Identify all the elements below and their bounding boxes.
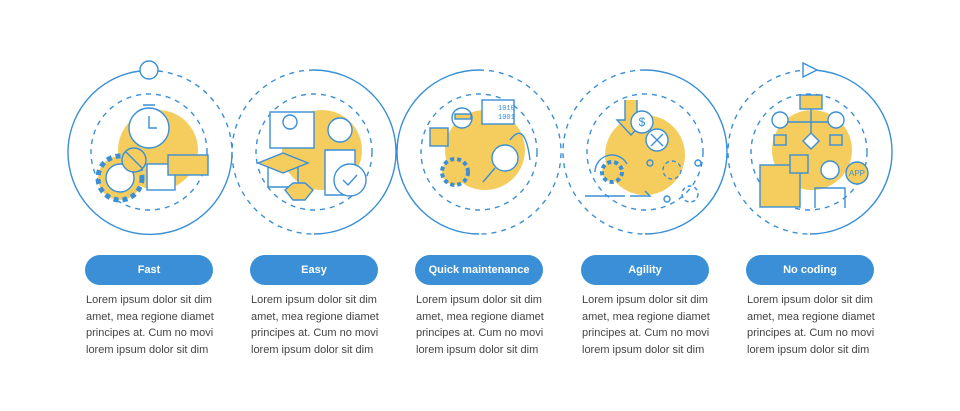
pill: Quick maintenance bbox=[415, 255, 543, 285]
panel: fast circle bbox=[68, 61, 232, 234]
text: agility: Lorem ipsum dolor sit dim amet, mea regione diamet principes at. Cum no movi lorem ipsum dolor sit dim bbox=[582, 294, 710, 356]
pill: Agility bbox=[581, 255, 709, 285]
pill: No coding: No coding bbox=[783, 264, 837, 276]
text: $ bbox=[639, 115, 646, 129]
panel: quick maintenance circle bbox=[397, 70, 561, 234]
pill: Fast bbox=[85, 255, 213, 285]
pill: Quick maintenance: Quick maintenance bbox=[429, 264, 529, 276]
text: fast: Lorem ipsum dolor sit dim amet, mea regione diamet principes at. Cum no movi lorem ipsum dolor sit dim bbox=[86, 294, 214, 356]
pill: Fast: Fast bbox=[138, 264, 160, 276]
text: no coding: Lorem ipsum dolor sit dim amet, mea regione diamet principes at. Cum no movi lorem ipsum dolor sit dim bbox=[747, 294, 875, 356]
text: easy: Lorem ipsum dolor sit dim amet, mea regione diamet principes at. Cum no movi lorem ipsum dolor sit dim bbox=[251, 294, 379, 356]
panel: agility circle bbox=[563, 70, 727, 234]
panel: no coding circle bbox=[728, 63, 892, 234]
pill: Easy bbox=[250, 255, 378, 285]
pill: Easy: Easy bbox=[301, 264, 327, 276]
text: 1010 bbox=[498, 105, 515, 113]
text: APP bbox=[849, 169, 865, 178]
text: quick maintenance: Lorem ipsum dolor sit dim amet, mea regione diamet principes at. Cum no movi lorem ipsum dolor sit dim bbox=[416, 294, 544, 356]
pill: No coding bbox=[746, 255, 874, 285]
panel: easy circle bbox=[232, 70, 396, 234]
text: 1001 bbox=[498, 114, 515, 122]
pill: Agility: Agility bbox=[628, 264, 662, 276]
